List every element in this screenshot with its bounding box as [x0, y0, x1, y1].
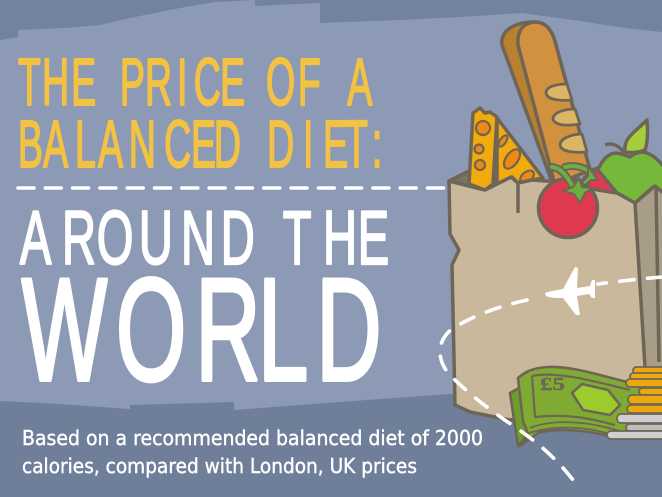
tomato calyx — [563, 178, 593, 203]
bag side panel — [635, 186, 662, 430]
icon: plane — [545, 267, 595, 315]
dashed divider — [18, 186, 446, 190]
bag interior — [449, 172, 500, 192]
title: around the world: WORLD — [22, 248, 382, 411]
illustration: grocery bag — [449, 22, 662, 430]
bag tear — [516, 183, 520, 213]
banknotes — [510, 367, 640, 446]
leaf — [625, 120, 648, 153]
tomato stalks — [552, 166, 592, 187]
back tomato — [580, 168, 617, 195]
title: the price of a balanced diet — [18, 45, 382, 182]
top brush band — [0, 0, 662, 40]
hexagon — [572, 384, 620, 415]
title: the price of a balanced diet: BALANCED DIET: — [18, 107, 382, 182]
title: around the world: AROUND THE — [20, 197, 389, 281]
baguette — [502, 22, 590, 185]
cheese — [469, 108, 543, 190]
subtitle: calories, compared with London, UK prices — [22, 454, 417, 478]
bottom brush band — [0, 392, 662, 497]
subtitle — [22, 426, 483, 478]
coins — [607, 367, 662, 439]
bag front — [449, 177, 647, 420]
£5 label: £5 — [540, 374, 565, 394]
flight path dashes — [440, 277, 662, 484]
subtitle: Based on a recommended balanced diet of 2000 — [22, 426, 483, 450]
title: the price of a balanced diet: THE PRICE OF A — [18, 45, 373, 120]
front tomato — [538, 165, 598, 238]
apple — [598, 120, 662, 205]
